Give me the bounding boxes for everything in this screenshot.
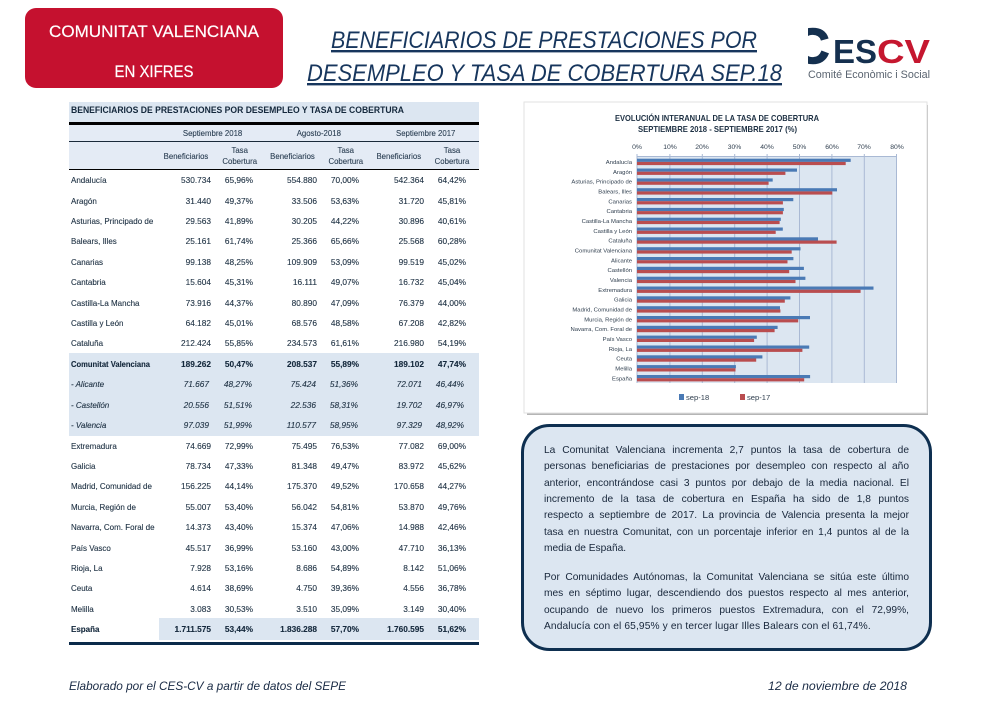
- row: Aragón: [71, 196, 467, 206]
- row: País Vasco: 53.160: [292, 543, 317, 553]
- row: Canarias: 109.909: [287, 257, 317, 267]
- row: País Vasco: 43,00%: [331, 543, 360, 553]
- row: País Vasco: País Vasco: [71, 544, 111, 553]
- row: Aragón: 33.506: [292, 196, 317, 206]
- row: Navarra: Navarra, Com. Foral de: [71, 523, 155, 532]
- chart category labels: Castilla y León: [593, 229, 632, 235]
- row: Balears: 25.366: [292, 236, 317, 246]
- logo: CES-CV: CV: [877, 33, 930, 70]
- header badge: Comunitat Valenciana en xifres: [25, 8, 283, 88]
- row: Ceuta: 4.750: [296, 583, 317, 593]
- row: Murcia: 54,81%: [331, 502, 360, 512]
- chart category labels: Cataluña: [608, 239, 633, 245]
- row: Extremadura: 75.495: [292, 441, 317, 451]
- row: Ceuta: 4.614: [190, 583, 211, 593]
- row: Andalucía: 530.734: [181, 175, 211, 185]
- row: Valencia: 110.577: [287, 420, 316, 430]
- row: Castilla y León: 67.208: [399, 318, 424, 328]
- row: Cataluña: [71, 338, 467, 348]
- row: Extremadura: [71, 441, 467, 451]
- row: Cantabria: Cantabria: [71, 278, 106, 287]
- table column headers: Cobertura: [328, 157, 364, 166]
- row: España: 51,62%: [438, 624, 467, 634]
- row: Aragón: 49,37%: [225, 196, 254, 206]
- logo: CES-CV: Comité Econòmic i Social: [808, 69, 930, 81]
- table column headers: Tasa: [338, 146, 355, 155]
- row: Melilla: 30,53%: [225, 604, 254, 614]
- table column headers: Beneficiarios: [164, 152, 208, 161]
- row: Murcia: 56.042: [292, 502, 317, 512]
- row: País Vasco: 36,99%: [225, 543, 254, 553]
- row: Balears: Balears, Illes: [71, 237, 117, 246]
- row: Andalucía: Andalucía: [71, 176, 107, 185]
- row: Asturias: 29.563: [186, 216, 211, 226]
- text block: first commentary paragraph: [544, 445, 910, 554]
- row: Navarra: 15.374: [292, 522, 317, 532]
- row: Balears: 65,66%: [331, 236, 360, 246]
- row: España: 53,44%: [225, 624, 254, 634]
- row: Cantabria: 15.604: [186, 277, 211, 287]
- table column headers: Beneficiarios: [270, 152, 315, 161]
- panel: bar chart: [524, 102, 928, 415]
- row: Melilla: 3.149: [403, 604, 424, 614]
- row: Castilla-La Mancha: 44,37%: [225, 298, 254, 308]
- row: Andalucía: 542.364: [394, 175, 424, 185]
- row: Murcia: 53,40%: [225, 502, 254, 512]
- chart category labels: Madrid, Comunidad de: [572, 308, 633, 314]
- row: Ceuta: [71, 583, 467, 593]
- chart category labels: Valencia: [610, 278, 633, 284]
- row: Castilla-La Mancha: 47,09%: [331, 298, 360, 308]
- row: Castellón: 19.702: [397, 400, 422, 410]
- chart category labels: Castellón: [607, 268, 632, 274]
- row: Valencia: 58,95%: [330, 420, 359, 430]
- row: Castellón: - Castellón: [71, 401, 110, 410]
- text block: first commentary paragraph: incremento de la tasa de cobertura en España ha sido de 1,8 puntos: [544, 494, 909, 505]
- row: Ceuta: 36,78%: [438, 583, 467, 593]
- row: Extremadura: 76,53%: [331, 441, 360, 451]
- logo: CES-CV: ES: [833, 33, 877, 70]
- row: Melilla: 3.510: [296, 604, 317, 614]
- row: Navarra: 43,40%: [225, 522, 254, 532]
- row: Madrid: 170.658: [394, 481, 424, 491]
- row: Castilla-La Mancha: 76.379: [399, 298, 424, 308]
- logo: CES-CV: [808, 28, 930, 78]
- row: Ceuta: Ceuta: [71, 584, 93, 593]
- row: Valencia: 48,92%: [436, 420, 465, 430]
- row: Balears: 25.161: [186, 236, 211, 246]
- row: Rioja: 53,16%: [225, 563, 254, 573]
- row: Castellón: 51,51%: [224, 400, 253, 410]
- chart category labels: Castilla-La Mancha: [582, 219, 633, 225]
- table column headers: Tasa: [444, 146, 461, 155]
- chart axis labels: [632, 144, 904, 151]
- row: España: 1.760.595: [387, 624, 424, 634]
- chart category labels: Comunitat Valenciana: [575, 248, 633, 254]
- chart axis labels: 40%: [760, 144, 774, 151]
- row: Castilla-La Mancha: 80.890: [292, 298, 317, 308]
- row: Valencia: 51,99%: [224, 420, 253, 430]
- row: Balears: [71, 236, 467, 246]
- row: Alicante: 71.667: [184, 379, 209, 389]
- row: Castellón: 58,31%: [330, 400, 359, 410]
- row: Alicante: [71, 379, 465, 389]
- row: País Vasco: 36,13%: [438, 543, 467, 553]
- row: Galicia: 83.972: [399, 461, 424, 471]
- text block: second commentary paragraph: Por Comunidades Autónomas, la Comunitat Valenciana se sitúa este último: [544, 572, 909, 583]
- row: Ceuta: 38,69%: [225, 583, 254, 593]
- title: BENEFICIARIOS DE PRESTACIONES POR: [331, 27, 757, 54]
- row: Melilla: [71, 604, 467, 614]
- row: Extremadura: Extremadura: [71, 442, 117, 451]
- chart axis labels: 20%: [695, 144, 709, 151]
- row: Castellón: [71, 400, 465, 410]
- chart axis labels: 10%: [663, 144, 677, 151]
- row: Castilla y León: 42,82%: [438, 318, 467, 328]
- row: España: [71, 624, 467, 634]
- row: Castellón: 22.536: [290, 400, 316, 410]
- text block: second commentary paragraph: [544, 572, 909, 632]
- table column headers: Cobertura: [222, 157, 258, 166]
- row: Alicante: 46,44%: [436, 379, 465, 389]
- chart legend: sep-18: [686, 393, 709, 402]
- chart axis labels: 30%: [728, 144, 741, 151]
- chart bars: [637, 159, 874, 381]
- chart axis labels: 60%: [825, 144, 839, 151]
- text block: second commentary paragraph: Andalucía con el 65,95% y en tercer lugar Illes Balears con el 61,74%.: [544, 621, 871, 632]
- logo: CES-CV: C: [794, 20, 829, 74]
- row: Cantabria: 45,31%: [225, 277, 254, 287]
- chart category labels: Cantabria: [606, 209, 633, 215]
- row: Castilla y León: [71, 318, 467, 328]
- row: Cataluña: 54,19%: [438, 338, 467, 348]
- row: Cantabria: [71, 277, 467, 287]
- text block: first commentary paragraph: media de España.: [544, 543, 626, 554]
- row: Valencia: - Valencia: [71, 421, 107, 430]
- row: Castilla y León: 48,58%: [331, 318, 360, 328]
- chart axis labels: 50%: [793, 144, 806, 151]
- panel: data table: [69, 102, 479, 645]
- row: Comunitat Valenciana: 50,47%: [225, 359, 254, 369]
- row: Valencia: [71, 420, 465, 430]
- chart category labels: Balears, Illes: [598, 190, 632, 196]
- row: Canarias: 48,25%: [225, 257, 254, 267]
- row: Castilla y León: 64.182: [186, 318, 211, 328]
- row: Aragón: 31.440: [186, 196, 211, 206]
- chart category labels: España: [612, 376, 633, 382]
- row: Castilla y León: 68.576: [292, 318, 317, 328]
- row: Galicia: 81.348: [292, 461, 317, 471]
- row: Balears: 25.568: [399, 236, 424, 246]
- row: Canarias: Canarias: [71, 258, 103, 267]
- row: Madrid: 49,52%: [331, 481, 360, 491]
- table column headers: Tasa: [231, 146, 249, 155]
- header badge: Comunitat Valenciana en xifres: COMUNITAT VALENCIANA: [49, 22, 260, 41]
- row: Balears: 60,28%: [438, 236, 467, 246]
- row: Extremadura: 74.669: [186, 441, 211, 451]
- row: País Vasco: 45.517: [186, 543, 211, 553]
- text block: second commentary paragraph: mes en séptimo lugar, descendiendo dos puestos respecto al mes anterior,: [544, 588, 909, 599]
- row: Melilla: Melilla: [71, 605, 94, 614]
- row: Murcia: Murcia, Región de: [71, 503, 136, 512]
- row: Melilla: 30,40%: [438, 604, 467, 614]
- table column headers: [69, 122, 479, 170]
- row: Galicia: [71, 461, 467, 471]
- row: Aragón: 31.720: [399, 196, 424, 206]
- row: Comunitat Valenciana: 208.537: [287, 359, 317, 369]
- footer: source: Elaborado por el CES-CV a partir de datos del SEPE: [69, 679, 347, 693]
- row: Melilla: 35,09%: [331, 604, 360, 614]
- table column headers: Beneficiarios: [376, 152, 421, 161]
- row: Castilla y León: 45,01%: [225, 318, 254, 328]
- row: Alicante: 51,36%: [330, 379, 359, 389]
- row: Comunitat Valenciana: 189.102: [394, 359, 424, 369]
- row: Castellón: 20.556: [183, 400, 209, 410]
- row: Cantabria: 45,04%: [438, 277, 467, 287]
- chart category labels: Galicia: [614, 298, 633, 304]
- row: Melilla: 3.083: [190, 604, 211, 614]
- row: Asturias: [71, 216, 467, 226]
- row: España: 57,70%: [331, 624, 360, 634]
- row: Rioja: 7.928: [190, 563, 211, 573]
- row: Navarra: 14.373: [186, 522, 211, 532]
- row: Cataluña: 55,85%: [225, 338, 254, 348]
- row: Andalucía: 64,42%: [438, 175, 467, 185]
- row: Rioja: 51,06%: [438, 563, 467, 573]
- chart category labels: Rioja, La: [609, 347, 633, 353]
- chart category labels: Canarias: [608, 199, 632, 205]
- row: Aragón: Aragón: [71, 197, 97, 206]
- chart category labels: Andalucía: [606, 160, 633, 166]
- row: Cantabria: 16.732: [399, 277, 424, 287]
- row: Ceuta: 4.556: [403, 583, 424, 593]
- row: Canarias: 45,02%: [438, 257, 467, 267]
- row: Madrid: 44,27%: [438, 481, 467, 491]
- text block: first commentary paragraph: anterior, encontrándose casi 3 puntos por debajo de la media nacional. El: [544, 478, 909, 489]
- row: Cataluña: 212.424: [181, 338, 211, 348]
- row: Balears: 61,74%: [225, 236, 254, 246]
- chart legend: [679, 393, 770, 402]
- row: Comunitat Valenciana: 55,89%: [331, 359, 360, 369]
- row: Andalucía: 70,00%: [331, 175, 360, 185]
- chart category labels: Alicante: [611, 258, 633, 264]
- row: Galicia: 78.734: [186, 461, 211, 471]
- row: España: 1.836.288: [280, 624, 317, 634]
- chart category labels: [570, 160, 633, 382]
- chart category labels: Ceuta: [616, 357, 633, 363]
- row: Andalucía: [71, 175, 467, 185]
- row: Ceuta: 39,36%: [331, 583, 360, 593]
- row: Extremadura: 72,99%: [225, 441, 254, 451]
- table title: BENEFICIARIOS DE PRESTACIONES POR DESEMPLEO Y TASA DE COBERTURA: [71, 105, 405, 115]
- chart axis labels: 0%: [632, 144, 642, 151]
- title: DESEMPLEO Y TASA DE COBERTURA SEP.18: [307, 60, 783, 87]
- text block: first commentary paragraph: personas beneficiarias de prestaciones por desempleo con respecto al año: [544, 461, 909, 472]
- row: Galicia: 49,47%: [331, 461, 360, 471]
- row: Alicante: 72.071: [397, 379, 422, 389]
- row: Castellón: 46,97%: [436, 400, 465, 410]
- row: Cantabria: 49,07%: [331, 277, 360, 287]
- highlight band: Comunitat Valenciana rows: [69, 353, 479, 436]
- text block: second commentary paragraph: ocupando de nuevo los primeros puestos Extremadura, con el 72,99%,: [544, 605, 909, 616]
- row: Andalucía: 65,96%: [225, 175, 254, 185]
- row: España: España: [71, 625, 100, 634]
- footer: date: 12 de noviembre de 2018: [768, 679, 907, 693]
- row: Asturias: 41,89%: [225, 216, 254, 226]
- chart category labels: Murcia, Región de: [584, 317, 633, 323]
- chart category labels: Asturias, Principado de: [571, 180, 633, 186]
- row: Valencia: 97.039: [184, 420, 209, 430]
- header badge: Comunitat Valenciana en xifres: EN XIFRES: [114, 62, 194, 81]
- row: Madrid: 175.370: [287, 481, 317, 491]
- row: País Vasco: [71, 543, 467, 553]
- text block: first commentary paragraph: respecto a septiembre de 2017. La provincia de Valencia presenta la mejor: [544, 510, 909, 521]
- row: Rioja: 8.142: [403, 563, 424, 573]
- row: Aragón: 45,81%: [438, 196, 467, 206]
- table column headers: Septiembre 2018: [183, 129, 242, 138]
- row: Madrid: 156.225: [181, 481, 211, 491]
- row: Comunitat Valenciana: [71, 359, 467, 369]
- row: Valencia: 97.329: [397, 420, 422, 430]
- chart title: EVOLUCIÓN INTERANUAL DE LA TASA DE COBERTURA: [615, 112, 819, 123]
- row: Andalucía: 554.880: [287, 175, 317, 185]
- row: Cataluña: 61,61%: [331, 338, 360, 348]
- row: Alicante: - Alicante: [71, 380, 105, 389]
- chart legend: sep-17: [747, 393, 770, 402]
- chart category labels: Melilla: [615, 366, 633, 372]
- row: Navarra: 14.988: [399, 522, 424, 532]
- row: Cataluña: 216.980: [394, 338, 424, 348]
- row: Madrid: [71, 481, 467, 491]
- row: Murcia: 49,76%: [438, 502, 467, 512]
- row: Canarias: 99.519: [399, 257, 424, 267]
- row: Castilla-La Mancha: 44,00%: [438, 298, 467, 308]
- row: Extremadura: 77.082: [399, 441, 424, 451]
- row: Castilla-La Mancha: Castilla-La Mancha: [71, 299, 140, 308]
- row: Asturias: 40,61%: [438, 216, 467, 226]
- chart category labels: Aragón: [613, 170, 632, 176]
- row: Asturias: 30.205: [292, 216, 317, 226]
- row: Rioja: Rioja, La: [71, 564, 103, 573]
- row: Rioja: 54,89%: [331, 563, 360, 573]
- row: Galicia: 47,33%: [225, 461, 254, 471]
- row: Canarias: 99.138: [186, 257, 211, 267]
- row: Canarias: 53,09%: [331, 257, 360, 267]
- chart category labels: Extremadura: [598, 288, 633, 294]
- row: Rioja: [71, 563, 467, 573]
- text block: first commentary paragraph: La Comunitat Valenciana incrementa 2,7 puntos la tasa de cobertura de: [544, 445, 909, 456]
- row: Aragón: 53,63%: [331, 196, 360, 206]
- row: Murcia: 53.870: [399, 502, 424, 512]
- row: Alicante: 48,27%: [224, 379, 253, 389]
- row: Navarra: [71, 522, 467, 532]
- row: Murcia: 55.007: [186, 502, 211, 512]
- plot background: [637, 157, 896, 383]
- table column headers: Agosto-2018: [297, 129, 341, 138]
- chart axis labels: 80%: [890, 144, 904, 151]
- row: Cataluña: 234.573: [287, 338, 317, 348]
- row: Galicia: 45,62%: [438, 461, 467, 471]
- text block: first commentary paragraph: tasa en nuestra Comunitat, con un porcentaje inferior en 1,4 puntos al de la: [544, 527, 909, 538]
- row: Castilla-La Mancha: 73.916: [186, 298, 211, 308]
- row: Asturias: 30.896: [399, 216, 424, 226]
- row: Comunitat Valenciana: Comunitat Valenciana: [71, 360, 151, 369]
- chart category labels: Navarra, Com. Foral de: [570, 327, 633, 333]
- row: Comunitat Valenciana: 47,74%: [438, 359, 467, 369]
- panel: commentary box background: [522, 426, 930, 650]
- table title: [69, 102, 479, 122]
- row: Canarias: [71, 257, 467, 267]
- row: Cantabria: 16.111: [293, 277, 317, 287]
- row: Asturias: 44,22%: [331, 216, 360, 226]
- highlight band: España totals: [159, 618, 479, 640]
- row: País Vasco: 47.710: [399, 543, 424, 553]
- row: Alicante: 75.424: [291, 379, 316, 389]
- chart title: SEPTIEMBRE 2018 - SEPTIEMBRE 2017 (%): [638, 125, 797, 134]
- row: Galicia: Galicia: [71, 462, 96, 471]
- chart axis labels: 70%: [857, 144, 871, 151]
- chart category labels: País Vasco: [603, 337, 633, 343]
- row: Rioja: 8.686: [296, 563, 317, 573]
- row: Navarra: 47,06%: [331, 522, 360, 532]
- row: Murcia: [71, 502, 467, 512]
- row: Cataluña: Cataluña: [71, 339, 104, 348]
- table column headers: Cobertura: [435, 157, 470, 166]
- row: Asturias: Asturias, Principado de: [71, 217, 154, 226]
- row: Madrid: 44,14%: [225, 481, 254, 491]
- row: España: 1.711.575: [175, 624, 211, 634]
- row: Extremadura: 69,00%: [438, 441, 467, 451]
- row: Castilla-La Mancha: [71, 298, 467, 308]
- title: [307, 27, 783, 87]
- row: Navarra: 42,46%: [438, 522, 467, 532]
- table column headers: Septiembre 2017: [396, 129, 455, 138]
- row: Madrid: Madrid, Comunidad de: [71, 482, 152, 491]
- row: Castilla y León: Castilla y León: [71, 319, 123, 328]
- chart title: [615, 112, 819, 134]
- row: Comunitat Valenciana: 189.262: [181, 359, 211, 369]
